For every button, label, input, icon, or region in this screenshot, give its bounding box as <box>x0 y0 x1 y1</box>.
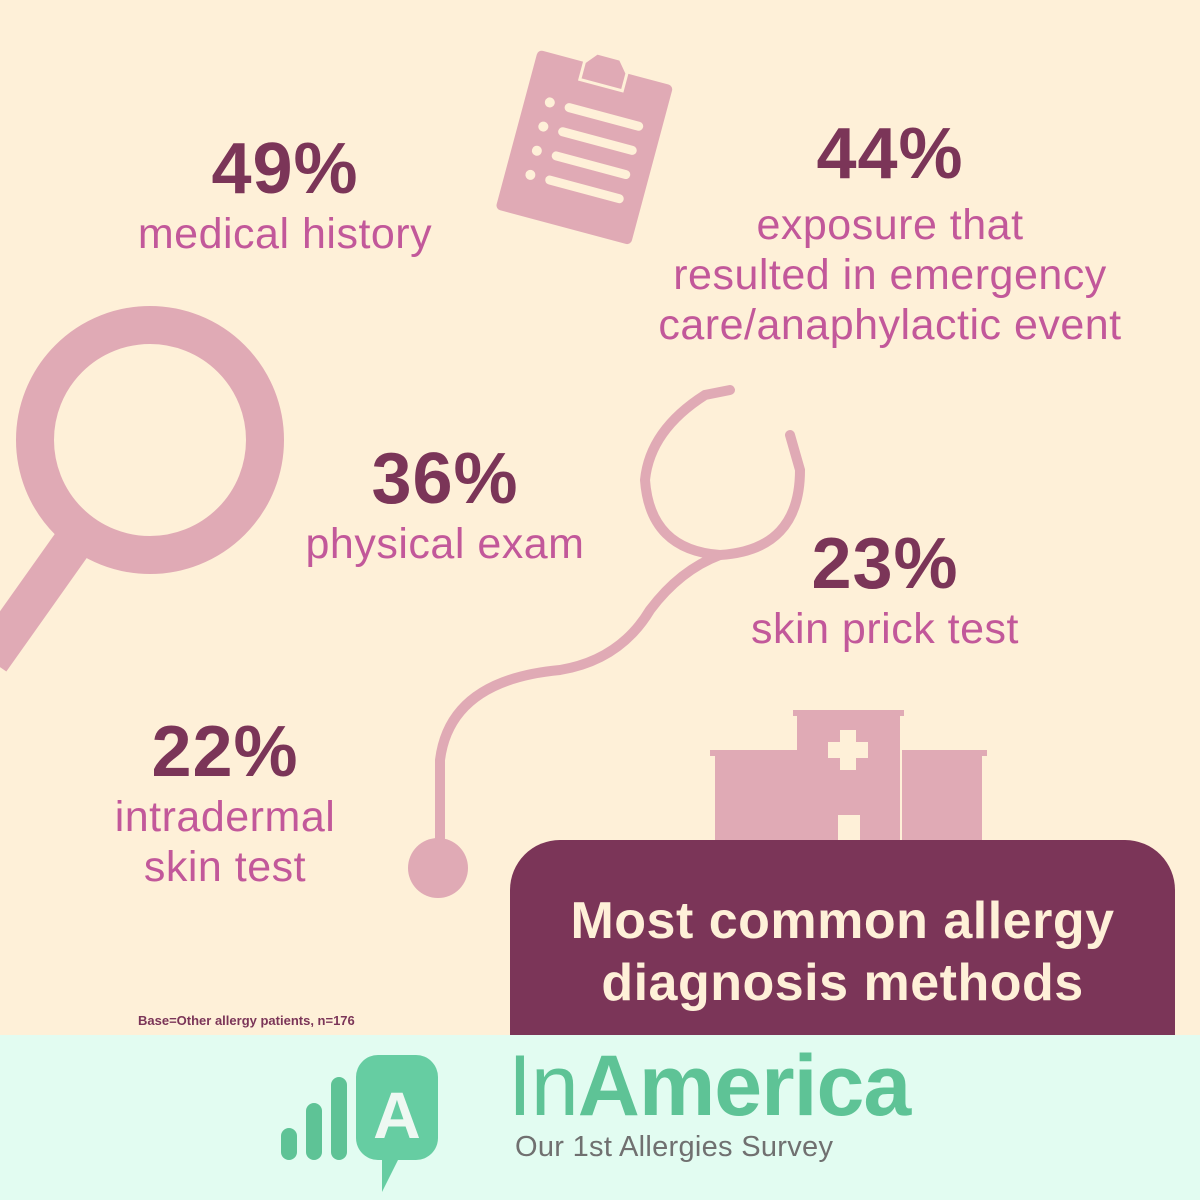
logo icon: A <box>373 1078 421 1152</box>
stat: 22%: intradermal <box>115 793 335 841</box>
footer band: Our 1st Allergies Survey <box>515 1131 833 1163</box>
title panel: diagnosis methods <box>601 954 1084 1012</box>
footer band <box>0 1035 1200 1200</box>
stat: 36%: physical exam <box>306 520 584 568</box>
base note: Base=Other allergy patients, n=176 <box>138 1013 355 1028</box>
icon: clipboard <box>495 38 676 245</box>
stat: 49% <box>138 129 432 258</box>
icon: stethoscope <box>408 390 800 898</box>
icon: magnifying glass <box>0 325 265 660</box>
stat: 49%: medical history <box>138 210 432 258</box>
logo icon <box>281 1055 438 1192</box>
stat: 23%: skin prick test <box>751 605 1019 653</box>
stat: 49%: 49% <box>211 129 359 209</box>
title panel: Most common allergy <box>570 892 1115 950</box>
stat: 36% <box>306 439 584 568</box>
stat: 22%: 22% <box>151 712 299 792</box>
stat: 23%: 23% <box>811 524 959 604</box>
stat: 22% <box>115 712 335 891</box>
stat: 44%: resulted in emergency <box>673 251 1107 299</box>
stat: 44%: 44% <box>816 114 964 194</box>
title panel <box>510 840 1175 1035</box>
stat: 36%: 36% <box>371 439 519 519</box>
stat: 44% <box>658 114 1122 349</box>
stat: 23% <box>751 524 1019 653</box>
stat: 44%: care/anaphylactic event <box>658 301 1122 349</box>
stat: 22%: skin test <box>144 843 306 891</box>
stat: 44%: exposure that <box>756 201 1024 249</box>
logo text: InAmerica <box>508 1038 910 1134</box>
icon: hospital <box>710 710 987 840</box>
